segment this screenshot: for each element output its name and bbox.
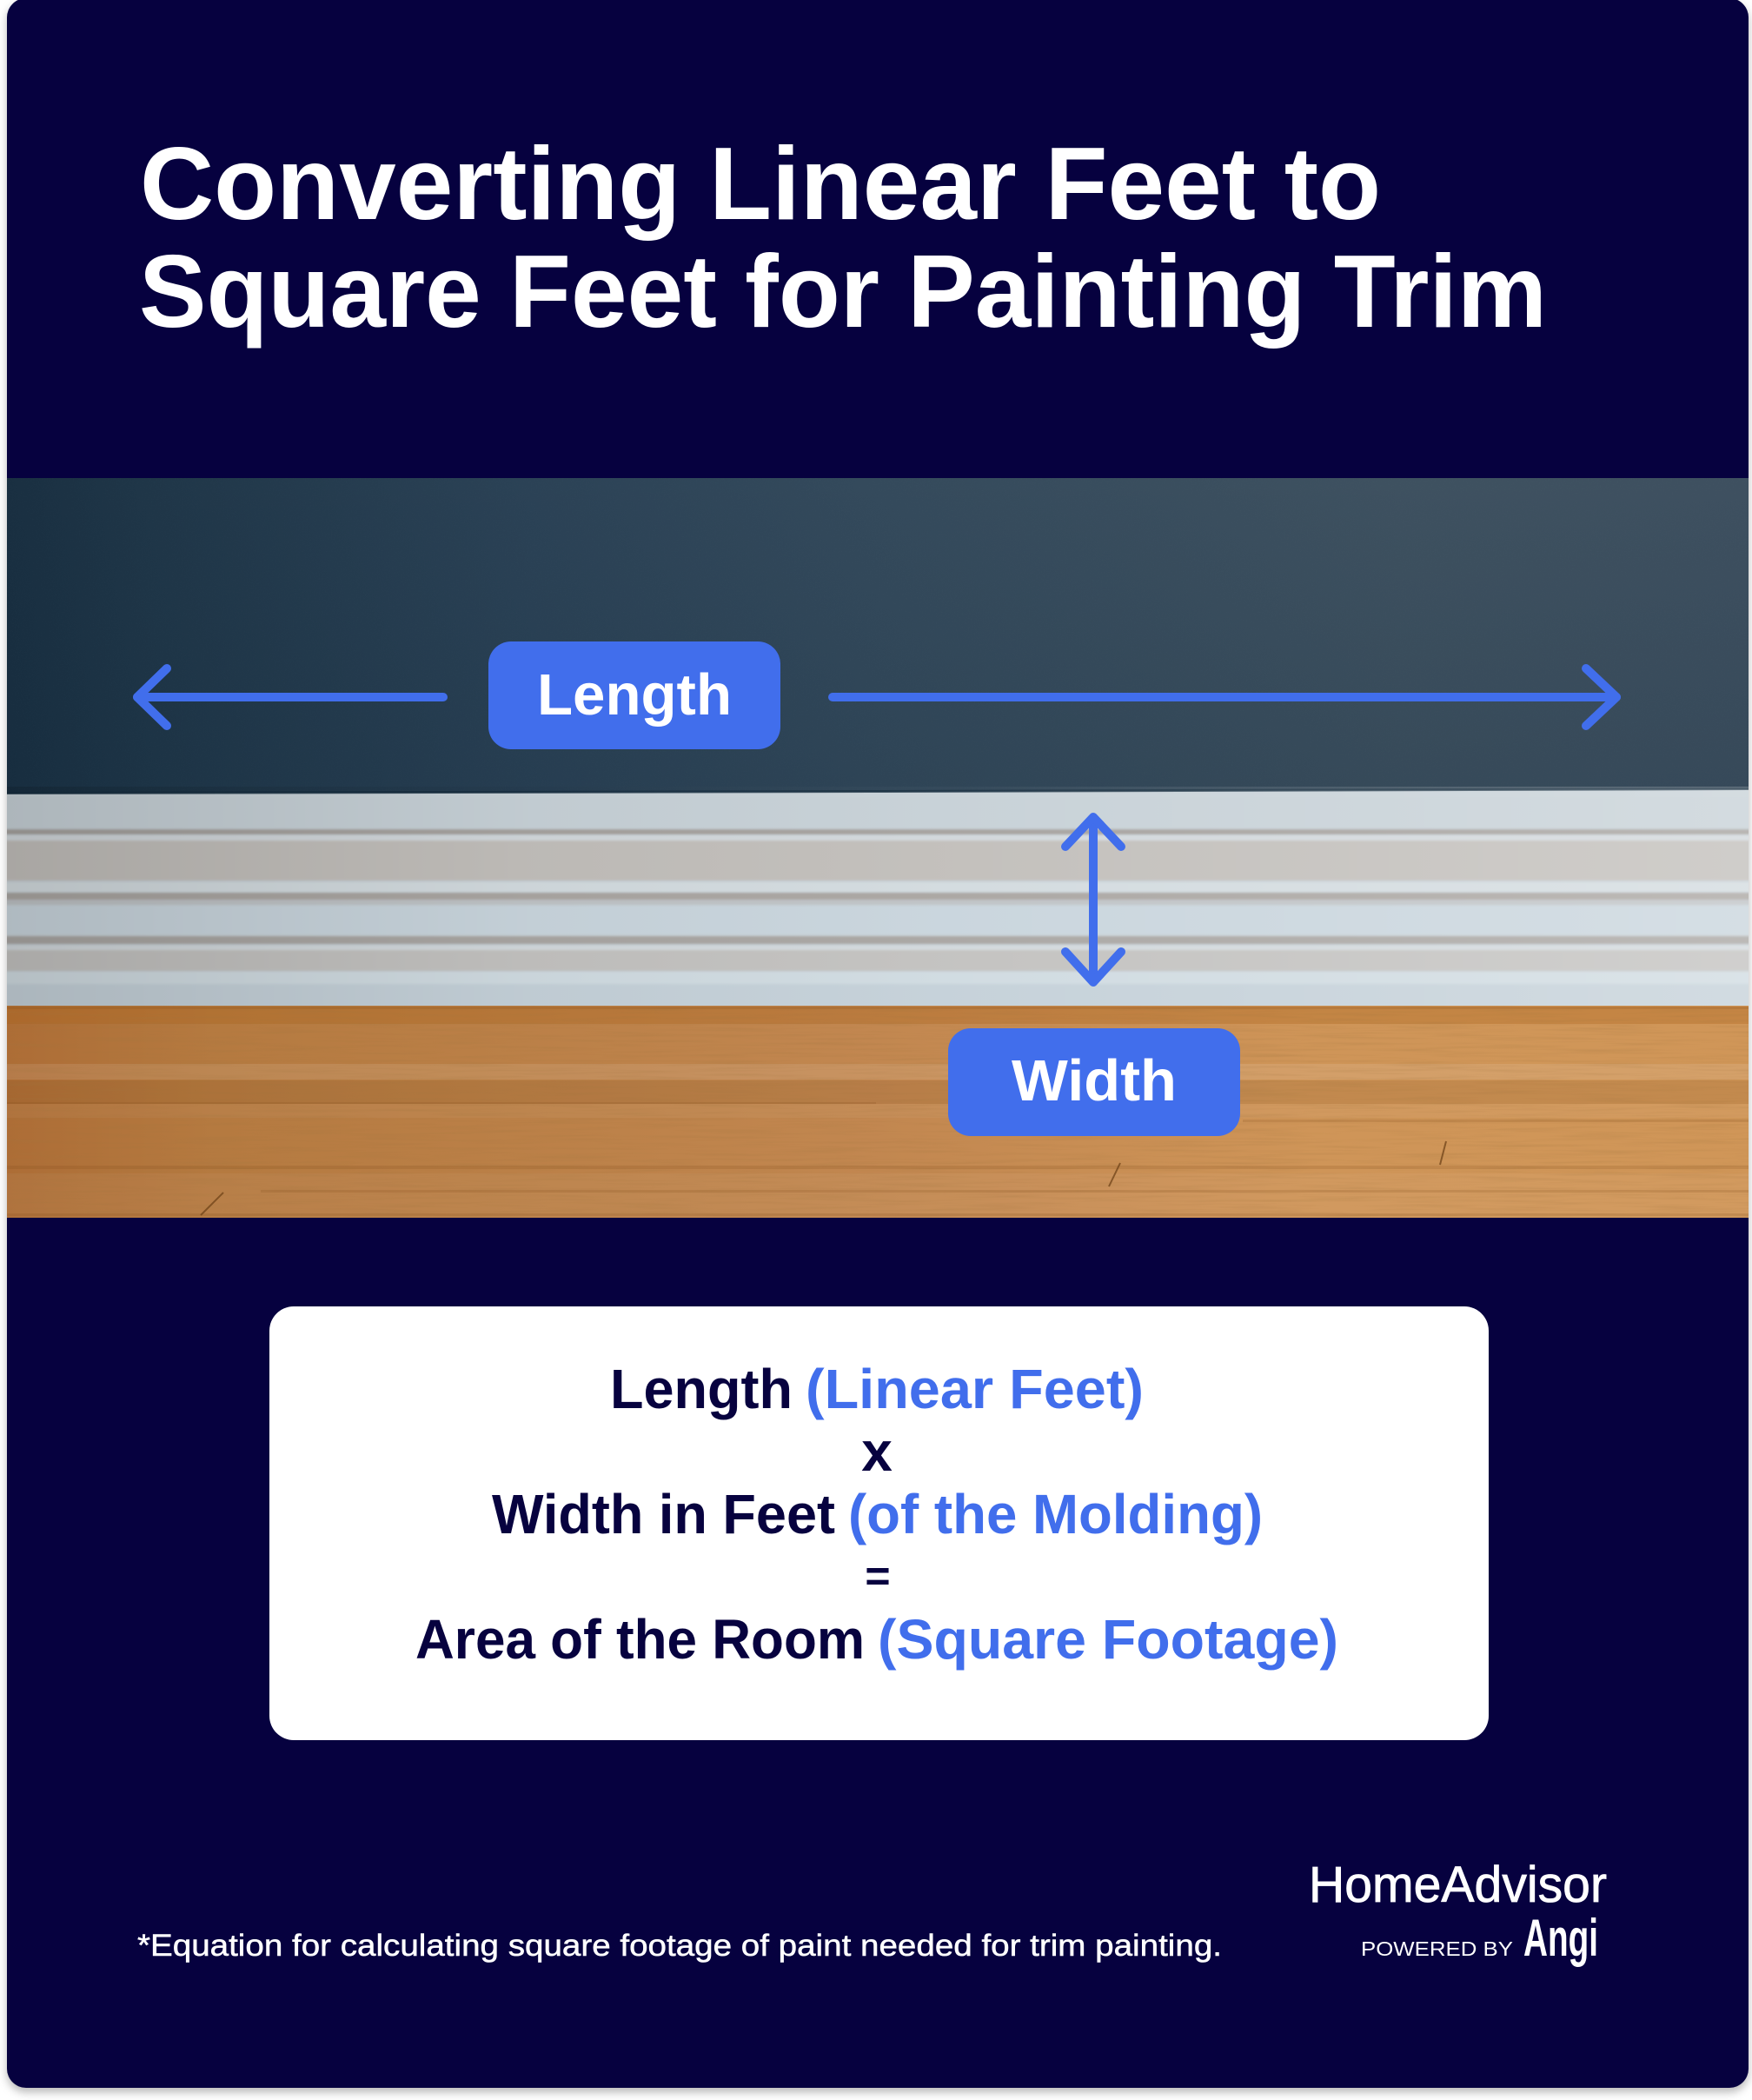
formula line: area: [415, 1608, 1338, 1671]
formula operator: equals: =: [865, 1552, 891, 1600]
wall: [7, 478, 1749, 796]
arrow: length, pointing right: [833, 668, 1616, 726]
baseboard trim: [7, 787, 1749, 1008]
title: [139, 126, 1547, 349]
arrow: length, pointing left: [137, 668, 443, 726]
photo: painted wall, baseboard trim and wood floor: [7, 478, 1749, 1219]
title: Square Feet for Painting Trim: [139, 234, 1547, 349]
label: Width: Width: [1012, 1048, 1177, 1113]
panel: formula card: [269, 1306, 1489, 1740]
formula line: area: (Square Footage): [878, 1608, 1338, 1671]
logo: HomeAdvisor powered by Angi: Angi: [1523, 1909, 1598, 1967]
logo: HomeAdvisor powered by Angi: POWERED BY: [1361, 1937, 1513, 1960]
arrow: width, double-headed vertical: [1065, 817, 1121, 982]
label: Length: Length: [537, 662, 732, 728]
label: Width: [948, 1028, 1240, 1136]
footnote: *Equation for calculating square footage of paint needed for trim painting.: [137, 1929, 1222, 1963]
logo: HomeAdvisor powered by Angi: HomeAdvisor: [1309, 1857, 1607, 1913]
formula line: length: (Linear Feet): [806, 1358, 1144, 1420]
formula line: length: Length: [610, 1358, 793, 1420]
formula line: width: [492, 1483, 1263, 1545]
logo: HomeAdvisor powered by Angi: [1309, 1857, 1607, 1967]
label: Length: [488, 641, 780, 749]
formula line: area: Area of the Room: [415, 1608, 865, 1671]
title: Converting Linear Feet to: [140, 126, 1381, 242]
formula operator: times: x: [861, 1420, 893, 1483]
formula line: width: Width in Feet: [492, 1483, 835, 1545]
wood floor: [7, 1006, 1749, 1219]
formula line: width: (of the Molding): [848, 1483, 1263, 1545]
formula line: length: [610, 1358, 1144, 1420]
